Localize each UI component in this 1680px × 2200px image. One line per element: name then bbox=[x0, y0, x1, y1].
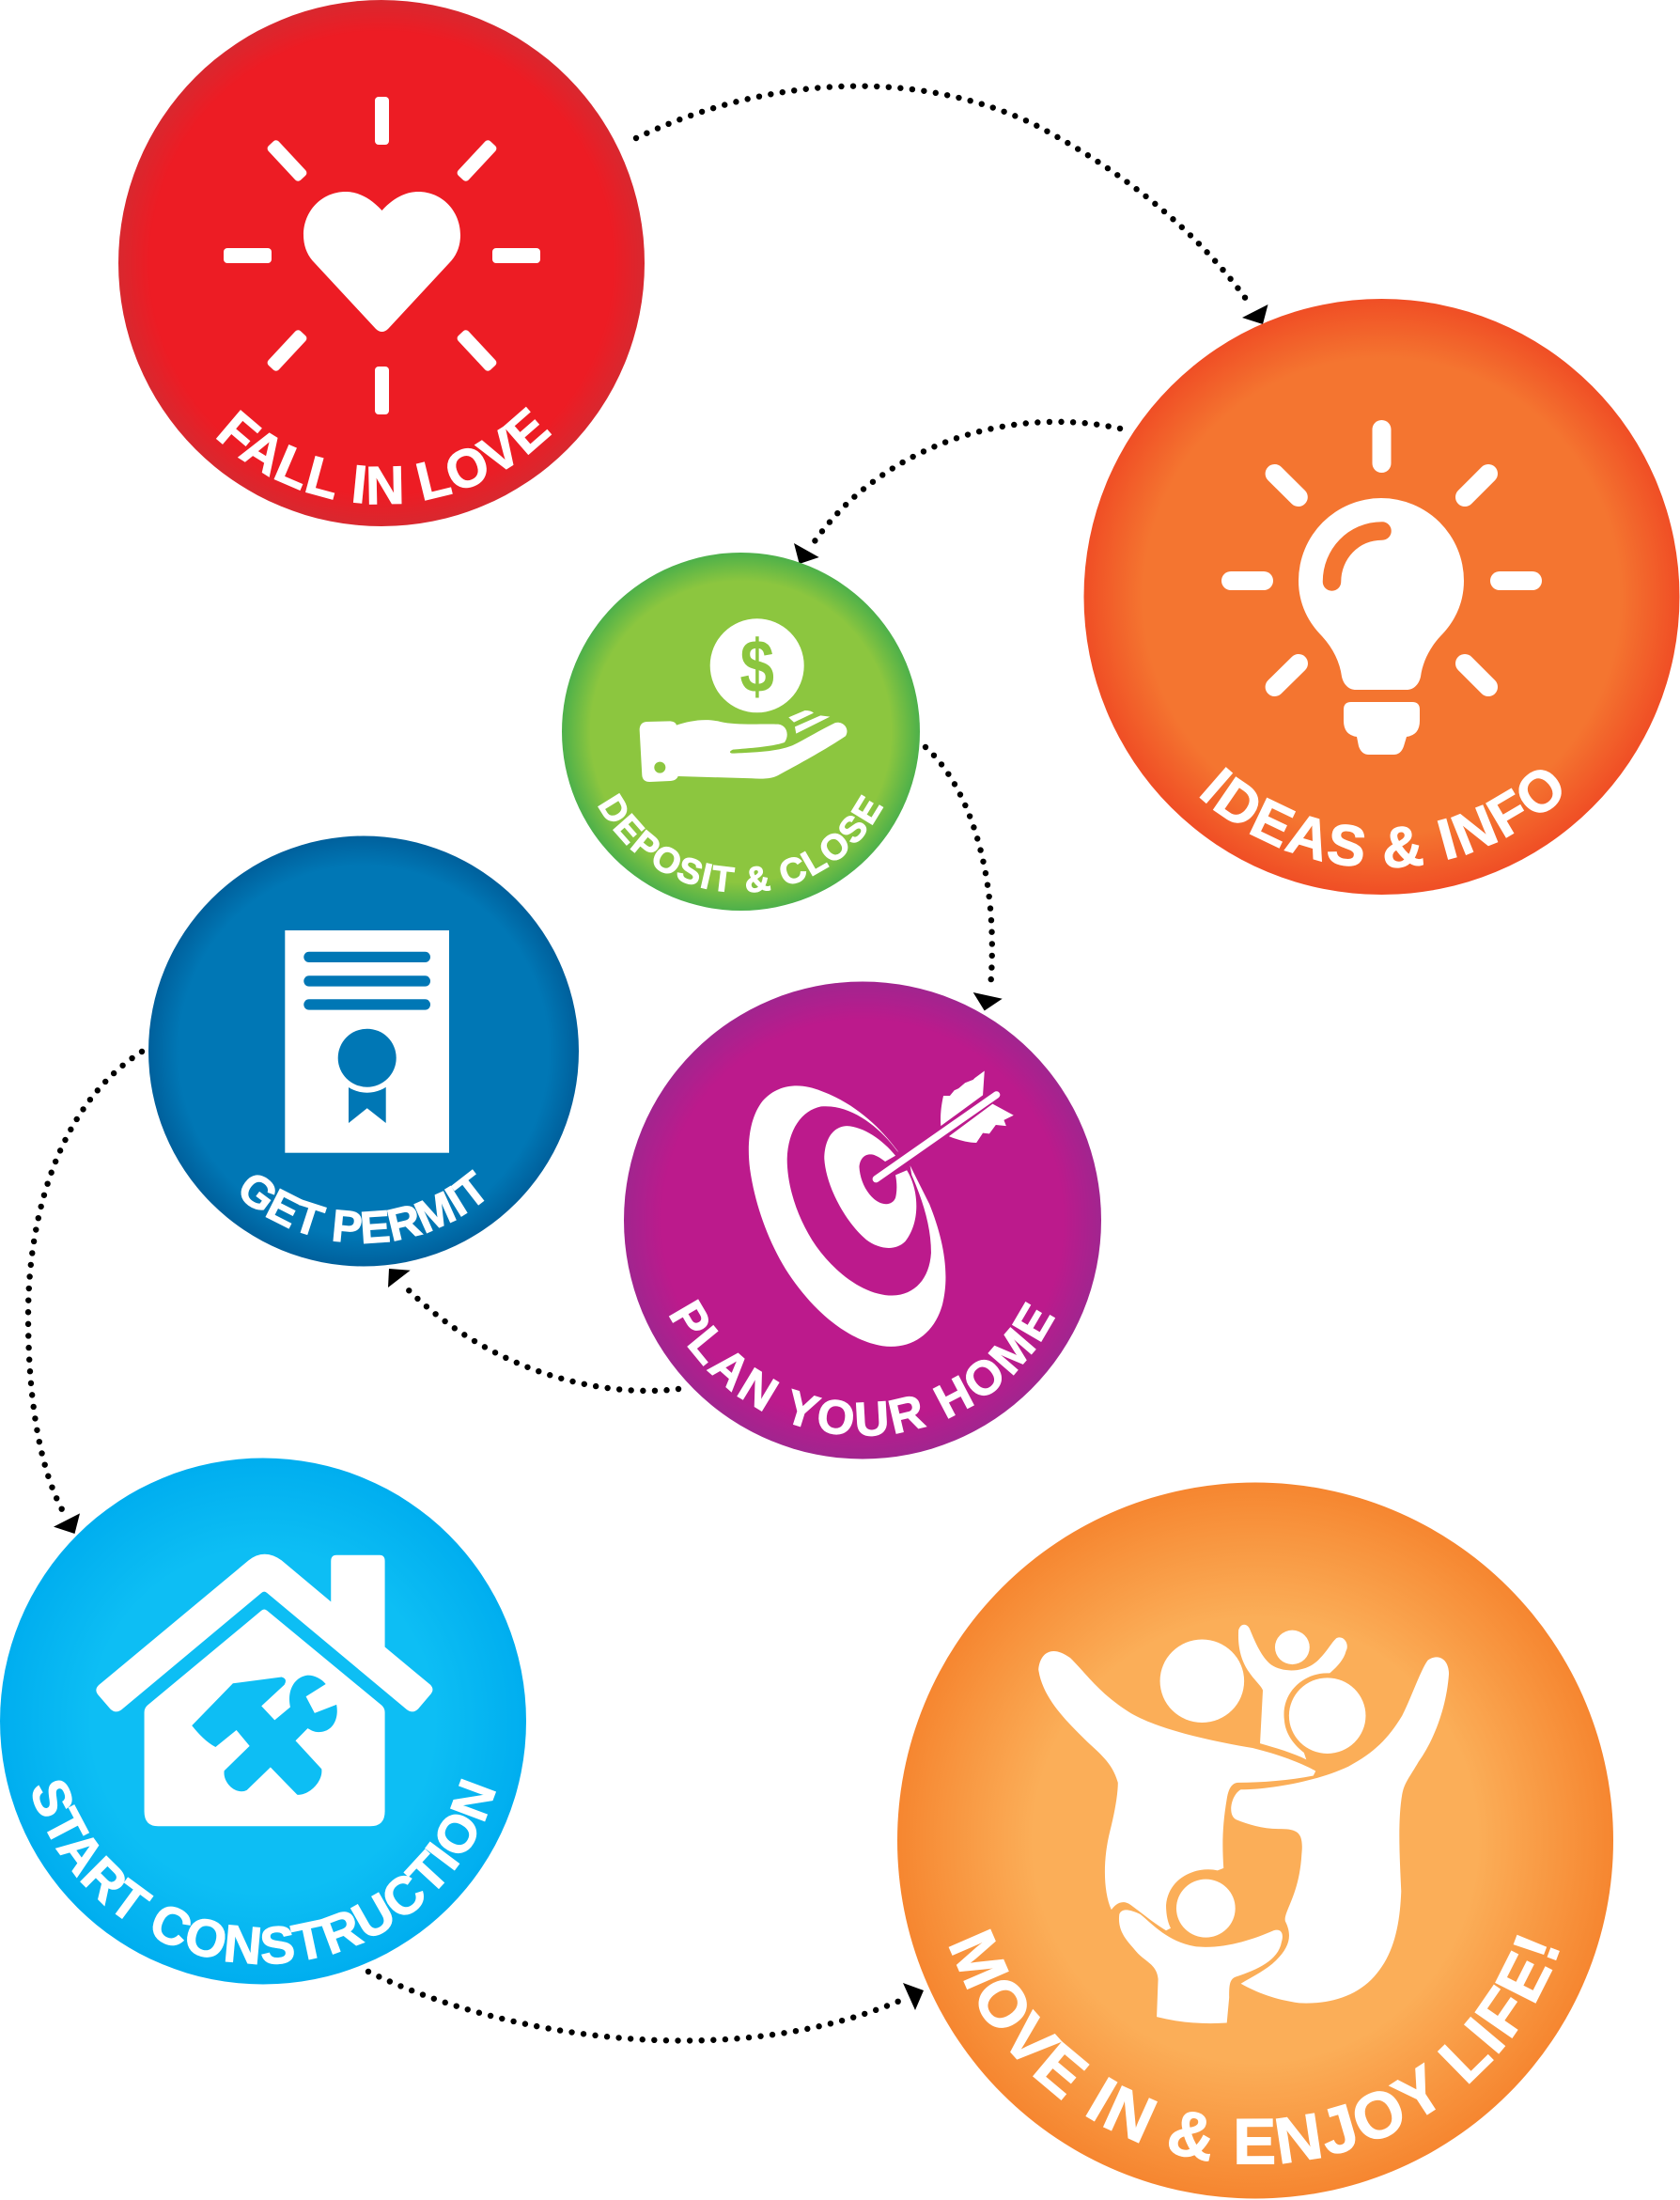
icon: house with tools bbox=[96, 1554, 432, 1826]
icon: heart with rays bbox=[224, 97, 540, 414]
label: ideas and info: IDEAS & INFO bbox=[1199, 767, 1562, 868]
arrow: plan your home to get permit bbox=[388, 1269, 678, 1391]
label: deposit and close: DEPOSIT & CLOSE bbox=[598, 793, 883, 893]
icon: permit document bbox=[285, 930, 449, 1153]
label: move in and enjoy life: MOVE IN & ENJOY LIFE! bbox=[949, 1928, 1560, 2164]
arrow: fall in love to ideas and info bbox=[636, 86, 1268, 324]
arrow: deposit and close to plan your home bbox=[926, 747, 1003, 1011]
icon: hand with coin bbox=[640, 618, 847, 782]
icon: target with arrow bbox=[749, 1071, 1014, 1347]
panel: ideas and info bbox=[1084, 299, 1680, 895]
icon: happy family bbox=[1038, 1625, 1449, 2023]
panel: start construction bbox=[0, 1459, 526, 1985]
arrow: get permit to start construction bbox=[28, 1052, 142, 1534]
panel: fall in love bbox=[118, 0, 645, 526]
label: get permit: GET PERMIT bbox=[241, 1169, 485, 1244]
arrow: ideas and info to deposit and close bbox=[794, 422, 1120, 564]
label: start construction: START CONSTRUCTION bbox=[32, 1778, 496, 1964]
icon: light bulb with rays bbox=[1231, 429, 1532, 755]
label: plan your home: PLAN YOUR HOME bbox=[669, 1299, 1056, 1436]
icon: hand with coin: $ bbox=[739, 624, 774, 709]
label: fall in love: FALL IN LOVE bbox=[216, 406, 552, 505]
panel: deposit and close bbox=[562, 553, 920, 911]
panel: move in and enjoy life bbox=[897, 1483, 1613, 2199]
panel: get permit bbox=[148, 836, 579, 1267]
panel: plan your home bbox=[624, 981, 1101, 1459]
arrow: start construction to move in bbox=[368, 1972, 924, 2040]
